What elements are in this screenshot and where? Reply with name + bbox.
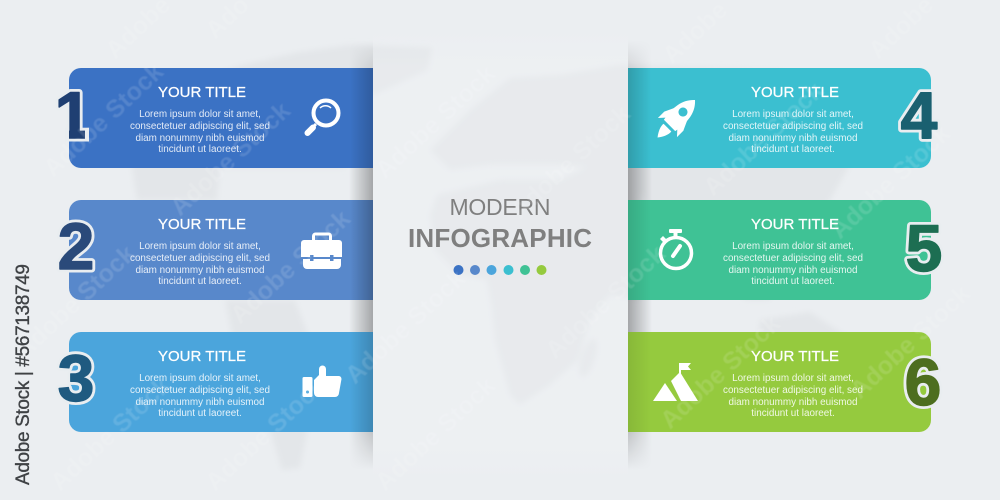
- panel: center: [373, 30, 628, 480]
- card 1 text: diam nonummy nibh euismod: [136, 133, 264, 144]
- number 1: [58, 89, 89, 142]
- card 1: [55, 68, 373, 168]
- card 3 text: Lorem ipsum dolor sit amet,: [139, 373, 261, 384]
- card 5 text: diam nonummy nibh euismod: [728, 265, 858, 276]
- card 2: [58, 200, 373, 300]
- number 4: 4: [901, 78, 938, 152]
- card 2 title: YOUR TITLE: [158, 216, 246, 233]
- number 6: 6: [905, 345, 941, 419]
- number 4: 4: [901, 78, 938, 152]
- card 5 text: tincidunt ut laoreet.: [751, 276, 835, 287]
- watermark pattern: Adobe Stock: [225, 205, 356, 329]
- card 5 text: consectetuer adipiscing elit, sed: [723, 253, 863, 264]
- stock credit: Adobe Stock | #567138749: [13, 264, 34, 485]
- watermark pattern: Adobe Stock: [698, 77, 829, 201]
- card 2 text: tincidunt ut laoreet.: [158, 276, 242, 287]
- number 2: 2: [58, 209, 94, 283]
- watermark pattern: Adobe Stock: [505, 100, 636, 224]
- card 6 text: [723, 373, 863, 419]
- watermark pattern: Adobe Stock: [845, 280, 976, 404]
- icon: magnifier: [308, 100, 338, 133]
- watermark pattern: Adobe Stock: [370, 372, 501, 496]
- watermark pattern: Adobe Stock: [540, 240, 671, 364]
- number 2: 2: [58, 209, 94, 283]
- card 3 title: YOUR TITLE: [158, 348, 246, 365]
- card 5 text: [723, 241, 863, 287]
- icon: thumbs up: [302, 366, 342, 397]
- icon: rocket: [648, 90, 705, 147]
- card 2 text: diam nonummy nibh euismod: [136, 265, 264, 276]
- number 5: 5: [906, 211, 942, 285]
- card 3 text: consectetuer adipiscing elit, sed: [130, 385, 270, 396]
- card 2 text: [130, 241, 270, 287]
- card 6 text: consectetuer adipiscing elit, sed: [723, 385, 863, 396]
- card 5: [628, 200, 942, 300]
- card 6 text: Lorem ipsum dolor sit amet,: [732, 373, 854, 384]
- center panel shadows: [349, 40, 652, 470]
- card 4 text: Lorem ipsum dolor sit amet,: [732, 109, 854, 120]
- colour dots: [454, 265, 546, 275]
- number 1: 1: [55, 78, 91, 152]
- card 4 text: tincidunt ut laoreet.: [751, 144, 835, 155]
- watermark pattern: Adobe Stock: [45, 372, 176, 496]
- card 3 text: diam nonummy nibh euismod: [136, 397, 264, 408]
- card 6: [628, 332, 941, 432]
- icon: mountain with flag: [653, 363, 698, 401]
- card 1 text: Lorem ipsum dolor sit amet,: [139, 109, 261, 120]
- number 1: 1: [55, 78, 91, 152]
- number 3: 3: [58, 341, 94, 415]
- card 5 title: YOUR TITLE: [751, 216, 839, 233]
- card 1 text: [130, 109, 270, 155]
- watermark pattern: Adobe Stock: [38, 58, 169, 182]
- card 6 title: YOUR TITLE: [751, 348, 839, 365]
- number 6: 6: [905, 345, 941, 419]
- card 3: [58, 332, 373, 432]
- card 4: [628, 68, 938, 168]
- card 1 title: YOUR TITLE: [158, 84, 246, 101]
- card 4 text: [723, 109, 863, 155]
- watermark pattern: Adobe Stock: [370, 60, 501, 184]
- card 3 text: tincidunt ut laoreet.: [158, 408, 242, 419]
- card 6 text: diam nonummy nibh euismod: [728, 397, 858, 408]
- watermark pattern: Adobe Stock: [340, 265, 471, 389]
- card 3 text: [130, 373, 270, 419]
- title: [408, 194, 592, 253]
- card 6 text: tincidunt ut laoreet.: [751, 408, 835, 419]
- card 2 text: consectetuer adipiscing elit, sed: [130, 253, 270, 264]
- card 5 text: Lorem ipsum dolor sit amet,: [732, 241, 854, 252]
- card 4 title: YOUR TITLE: [751, 84, 839, 101]
- icon: briefcase: [301, 232, 342, 269]
- card 2 text: Lorem ipsum dolor sit amet,: [139, 241, 261, 252]
- card 1 text: tincidunt ut laoreet.: [158, 144, 242, 155]
- number 3: 3: [58, 341, 94, 415]
- title: INFOGRAPHIC: [408, 223, 592, 253]
- number 5: 5: [906, 211, 942, 285]
- watermark pattern: Adobe Stock: [655, 310, 786, 434]
- watermark pattern: Adobe Stock: [825, 120, 956, 244]
- card 1 text: consectetuer adipiscing elit, sed: [130, 121, 270, 132]
- icon: stopwatch: [660, 229, 692, 268]
- card 4 text: consectetuer adipiscing elit, sed: [723, 121, 863, 132]
- watermark pattern: Adobe Stock: [165, 97, 296, 221]
- watermark pattern: Adobe Stock: [10, 240, 141, 364]
- title: MODERN: [450, 194, 550, 220]
- card 4 text: diam nonummy nibh euismod: [728, 133, 858, 144]
- world map: [132, 45, 870, 470]
- watermark pattern: Adobe Stock: [200, 372, 331, 496]
